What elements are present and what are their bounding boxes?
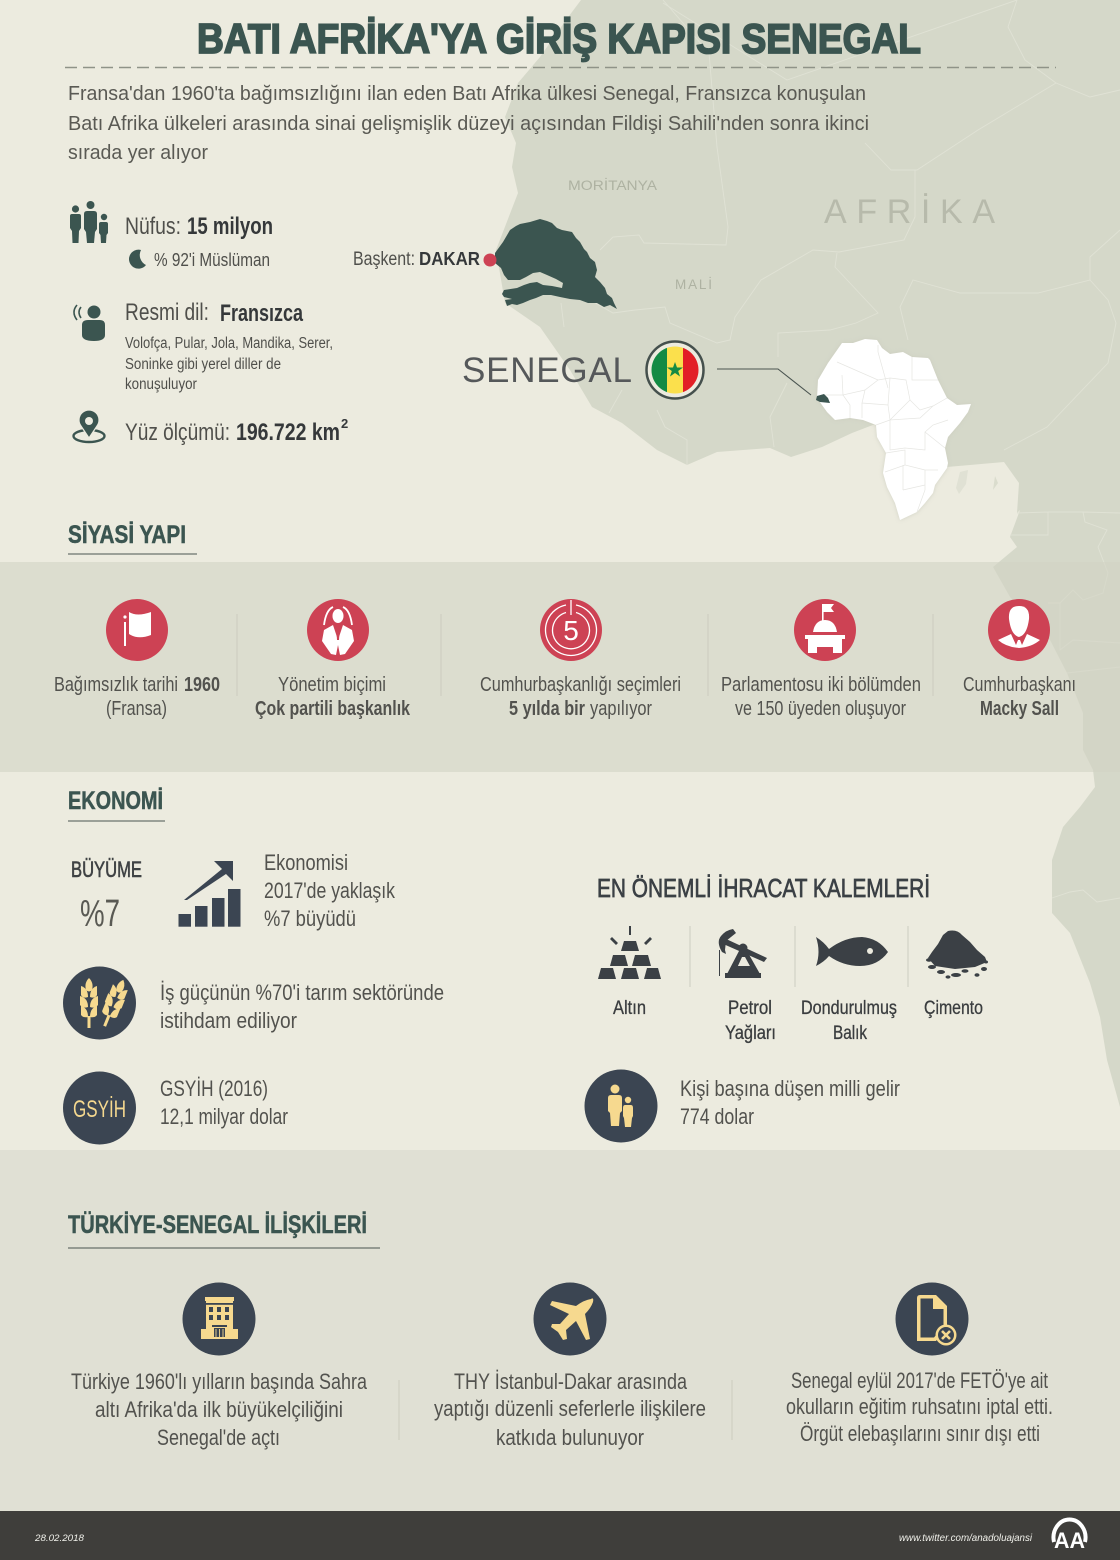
footer bar bbox=[0, 1511, 1120, 1560]
GDP text: 12,1 milyar dolar bbox=[160, 1104, 288, 1129]
area text: 196.722 km bbox=[236, 419, 340, 446]
icon: official language bbox=[74, 305, 105, 341]
item: elections: yapılıyor bbox=[590, 698, 652, 720]
income text: Kişi başına düşen milli gelir bbox=[680, 1076, 900, 1101]
icon: president bbox=[988, 599, 1050, 661]
label: petroleum oils bbox=[725, 998, 776, 1044]
agriculture text: istihdam ediliyor bbox=[160, 1008, 297, 1033]
relation text: embassy: altı Afrika'da ilk büyükelçiliğini bbox=[95, 1397, 343, 1422]
growth text: 2017'de yaklaşık bbox=[264, 878, 396, 903]
capital label: Başkent: bbox=[353, 249, 415, 270]
icon: population bbox=[70, 201, 108, 243]
relation text: embassy: Senegal'de açtı bbox=[157, 1425, 280, 1450]
item: parliament: Parlamentosu iki bölümden bbox=[721, 674, 921, 696]
item: independence: (Fransa) bbox=[106, 698, 167, 720]
item: independence bbox=[54, 674, 220, 720]
muslim share text: % 92'i Müslüman bbox=[154, 250, 270, 270]
relation text: embassy: Türkiye 1960'lı yılların başında Sahra bbox=[71, 1369, 368, 1394]
growth figure: BÜYÜME bbox=[71, 857, 142, 882]
language text: Fransızca bbox=[220, 300, 303, 327]
population text: Nüfus: bbox=[125, 213, 181, 240]
band: Turkey relations background bbox=[0, 1150, 1120, 1511]
label: cement: Çimento bbox=[924, 998, 983, 1019]
relation text: schools bbox=[786, 1368, 1053, 1446]
map label: Mali: MALİ bbox=[675, 277, 712, 292]
country name: SENEGAL bbox=[462, 351, 632, 390]
icon: five years bbox=[540, 599, 602, 661]
item: president: Macky Sall bbox=[980, 698, 1059, 720]
heading: exports: EN ÖNEMLİ İHRACAT KALEMLERİ bbox=[597, 873, 930, 903]
map: Senegal bbox=[495, 219, 617, 309]
language text: Volofça, Pular, Jola, Mandika, Serer, bbox=[125, 335, 333, 352]
icon: wheat bbox=[63, 966, 136, 1040]
relation text: schools: Senegal eylül 2017'de FETÖ'ye ait bbox=[791, 1368, 1048, 1393]
relation text: flights: yaptığı düzenli seferlerle ilişkilere bbox=[434, 1396, 706, 1421]
icon: GDP badge bbox=[63, 1072, 136, 1144]
income text bbox=[680, 1076, 900, 1129]
item: government type: Çok partili başkanlık bbox=[255, 698, 411, 720]
language text: Soninke gibi yerel diller de bbox=[125, 356, 281, 373]
icon: income per person bbox=[584, 1070, 658, 1142]
icon: gold bars bbox=[598, 926, 661, 979]
intro text: Fransa'dan 1960'ta bağımsızlığını ilan eden Batı Afrika ülkesi Senegal, Fransızca konuşulan bbox=[68, 83, 866, 105]
item: government type: Yönetim biçimi bbox=[278, 674, 386, 696]
leader line bbox=[717, 369, 811, 395]
growth text: %7 büyüdü bbox=[264, 906, 356, 931]
item: elections: Cumhurbaşkanlığı seçimleri bbox=[480, 674, 681, 696]
icon: embassy building bbox=[182, 1282, 256, 1356]
intro text: sırada yer alıyor bbox=[68, 142, 208, 164]
logo: Anadolu Agency: AA bbox=[1054, 1528, 1085, 1553]
footer date: 28.02.2018 bbox=[34, 1533, 85, 1544]
heading: Turkey-Senegal relations: TÜRKİYE-SENEGAL İLİŞKİLERİ bbox=[68, 1210, 367, 1239]
growth text: Ekonomisi bbox=[264, 850, 348, 875]
item: independence: Bağımsızlık tarihi bbox=[54, 674, 178, 696]
title: BATI AFRİKA'YA GİRİŞ KAPISI SENEGAL bbox=[197, 15, 921, 62]
growth figure bbox=[71, 857, 142, 935]
icon: location pin bbox=[74, 410, 104, 442]
label: petroleum oils: Yağları bbox=[725, 1023, 776, 1044]
map label: Africa: AFRİKA bbox=[824, 193, 995, 231]
intro text bbox=[68, 83, 869, 164]
agriculture text: İş güçünün %70'i tarım sektöründe bbox=[160, 980, 444, 1005]
icon: fish bbox=[816, 937, 888, 966]
capital label bbox=[353, 248, 480, 270]
icon: parliament bbox=[794, 599, 856, 661]
heading: economy bbox=[68, 787, 165, 821]
area text bbox=[125, 416, 348, 446]
label: gold: Altın bbox=[613, 998, 646, 1019]
GDP text bbox=[160, 1076, 288, 1129]
icon: GDP badge: GSYİH bbox=[73, 1096, 126, 1123]
map label: Mauritania: MORİTANYA bbox=[568, 178, 657, 193]
relation text: flights bbox=[434, 1369, 706, 1450]
relation text: schools: Örgüt elebaşılarını sınır dışı etti bbox=[800, 1421, 1040, 1446]
item: independence: 1960 bbox=[184, 674, 220, 696]
item: president: Cumhurbaşkanı bbox=[963, 674, 1076, 696]
background map of West Africa bbox=[496, 0, 1120, 1107]
GDP text: GSYİH (2016) bbox=[160, 1076, 268, 1101]
icon: flag bbox=[106, 599, 168, 661]
Dakar dot bbox=[484, 254, 496, 266]
item: president bbox=[963, 674, 1076, 720]
intro text: Batı Afrika ülkeleri arasında sinai gelişmişlik düzeyi açısından Fildişi Sahili'nden sonra ikinci bbox=[68, 113, 869, 135]
population text bbox=[125, 213, 273, 240]
icon: government bbox=[307, 599, 369, 661]
area text: Yüz ölçümü: bbox=[125, 419, 230, 446]
icon: airplane bbox=[534, 1282, 606, 1356]
heading: economy: EKONOMİ bbox=[68, 787, 163, 815]
icon: crescent bbox=[129, 250, 146, 269]
footer url: www.twitter.com/anadoluajansi bbox=[899, 1533, 1033, 1544]
item: parliament bbox=[721, 674, 921, 720]
income text: 774 dolar bbox=[680, 1104, 754, 1129]
icon: cancelled document bbox=[896, 1282, 968, 1356]
item: elections: 5 yılda bir bbox=[509, 698, 585, 720]
language text: konuşuluyor bbox=[125, 376, 197, 393]
language text: Resmi dil: bbox=[125, 299, 209, 326]
relation text: embassy bbox=[71, 1369, 368, 1450]
population text: 15 milyon bbox=[187, 213, 273, 240]
language text bbox=[125, 299, 333, 393]
growth text bbox=[264, 850, 396, 931]
label: frozen fish bbox=[801, 998, 897, 1044]
icon: five years: 5 bbox=[563, 615, 579, 646]
item: elections bbox=[480, 674, 681, 720]
relation text: flights: katkıda bulunuyor bbox=[496, 1425, 644, 1450]
relation text: schools: okulların eğitim ruhsatını iptal etti. bbox=[786, 1394, 1053, 1419]
item: government type bbox=[255, 674, 411, 720]
map: Africa locator bbox=[816, 339, 971, 520]
icon: cement pile bbox=[926, 930, 988, 979]
band: political section background bbox=[0, 562, 1120, 772]
icon: growth chart bbox=[178, 861, 240, 927]
agriculture text bbox=[160, 980, 444, 1033]
icon: Senegal flag bbox=[646, 342, 704, 398]
item: parliament: ve 150 üyeden oluşuyor bbox=[735, 698, 906, 720]
heading: political structure: SİYASİ YAPI bbox=[68, 521, 186, 549]
label: frozen fish: Dondurulmuş bbox=[801, 998, 897, 1019]
area text: 2 bbox=[341, 416, 348, 431]
capital label: DAKAR bbox=[419, 248, 480, 269]
growth figure: %7 bbox=[80, 893, 120, 935]
label: frozen fish: Balık bbox=[833, 1023, 867, 1044]
icon: oil pump bbox=[719, 929, 767, 978]
relation text: flights: THY İstanbul-Dakar arasında bbox=[454, 1369, 688, 1394]
label: petroleum oils: Petrol bbox=[728, 998, 772, 1019]
